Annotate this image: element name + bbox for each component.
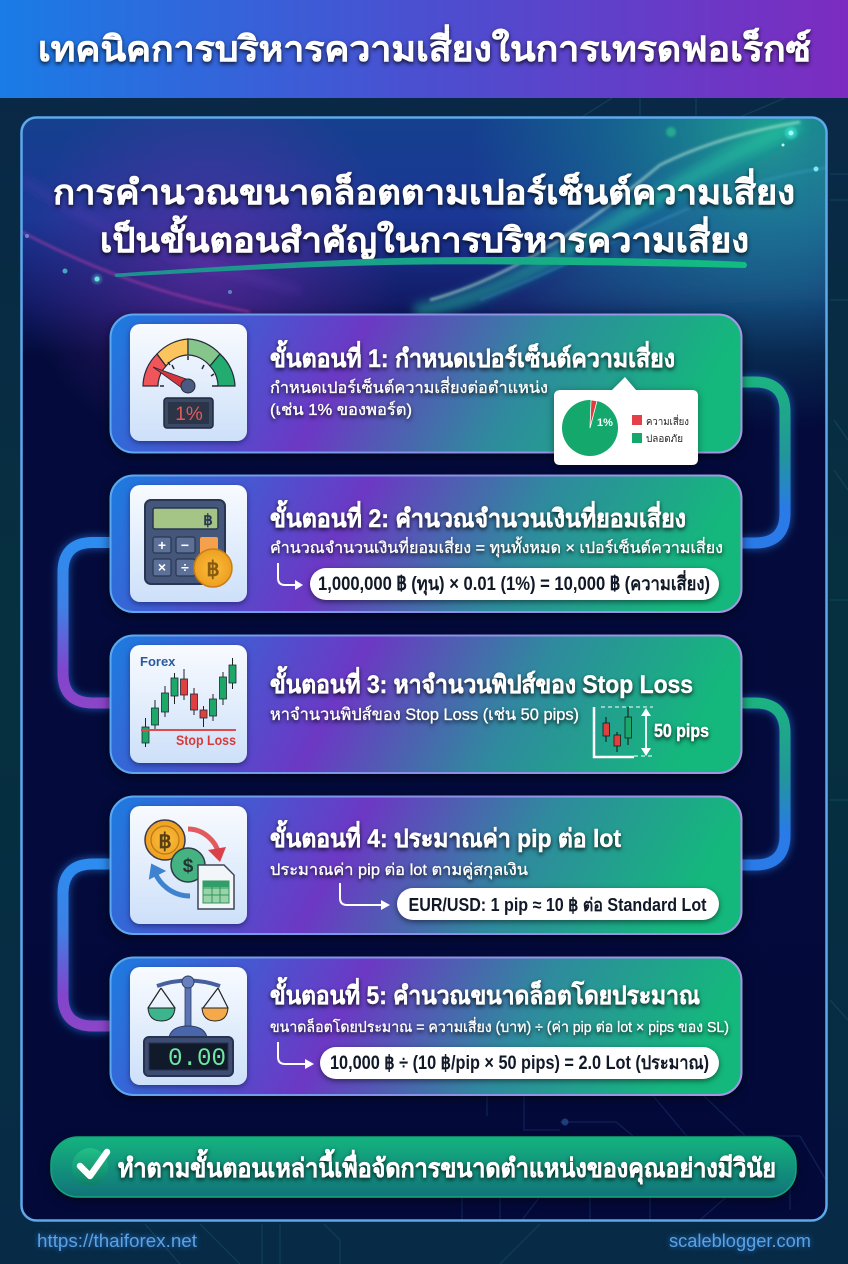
step 3 description: หาจำนวนพิปส์ของ Stop Loss (เช่น 50 pips) xyxy=(270,705,579,724)
step 5 title: ขั้นตอนที่ 5: คำนวณขนาดล็อตโดยประมาณ xyxy=(270,976,700,1010)
connector: step 4 to 5 xyxy=(63,864,110,1026)
step 2 title: ขั้นตอนที่ 2: คำนวณจำนวนเงินที่ยอมเสี่ยง xyxy=(270,499,686,533)
connectors between steps xyxy=(63,382,785,1026)
icon: currency exchange: $ xyxy=(183,856,194,877)
formula pill: 1,000,000 ฿ (ทุน) × 0.01 (1%) = 10,000 ฿ (ความเสี่ยง) xyxy=(318,570,710,596)
icon: currency exchange: ฿ xyxy=(158,830,172,853)
step 5 description: ขนาดล็อตโดยประมาณ = ความเสี่ยง (บาท) ÷ (ค่า pip ต่อ lot × pips ของ SL) xyxy=(270,1017,729,1036)
icon: calculator with baht coin: ฿ xyxy=(206,558,220,581)
step 1 title: ขั้นตอนที่ 1: กำหนดเปอร์เซ็นต์ความเสี่ยง xyxy=(270,339,675,373)
circuit background lines xyxy=(145,98,848,1264)
callout: pie chart: 1% xyxy=(597,417,613,429)
icon: calculator with baht coin: ฿ xyxy=(203,512,213,529)
icon: forex candlestick chart: Forex xyxy=(140,654,176,669)
footer link: right: scaleblogger.com xyxy=(669,1231,811,1251)
icon: calculator with baht coin: ÷ xyxy=(181,559,189,575)
step 4 card xyxy=(110,796,742,934)
icon: risk gauge: 1% xyxy=(175,404,203,425)
callout: pie chart: ความเสี่ยง xyxy=(646,414,689,428)
icon: check mark xyxy=(72,1148,108,1186)
heading: lot size calculation: การคำนวณขนาดล็อตตามเปอร์เซ็นต์ความเสี่ยง xyxy=(53,168,795,212)
closing banner xyxy=(51,1137,796,1197)
formula pill xyxy=(310,568,719,600)
arrow xyxy=(340,883,390,910)
step 5 card xyxy=(110,958,742,1095)
callout: pie chart: ปลอดภัย xyxy=(646,434,683,445)
formula pill: 10,000 ฿ ÷ (10 ฿/pip × 50 pips) = 2.0 Lot (ประมาณ) xyxy=(330,1053,709,1074)
banner message: ทำตามขั้นตอนเหล่านี้เพื่อจัดการขนาดตำแหน่งของคุณอย่างมีวินัย xyxy=(118,1148,776,1185)
connector: step 2 to 3 xyxy=(63,542,110,703)
arrow xyxy=(278,1042,314,1069)
mini chart: 50 pips stop distance: 50 pips xyxy=(654,721,709,741)
footer link: left: https://thaiforex.net xyxy=(37,1231,197,1251)
step 1 description xyxy=(270,376,548,419)
connector: step 3 to 4 xyxy=(742,703,785,865)
icon: currency exchange xyxy=(145,820,234,909)
icon: calculator with baht coin: × xyxy=(158,559,166,575)
heading: lot size calculation xyxy=(53,168,795,261)
icon: calculator with baht coin: − xyxy=(181,537,189,553)
heading: lot size calculation: เป็นขั้นตอนสำคัญในการบริหารความเสี่ยง xyxy=(100,215,749,261)
example pill: EUR/USD: 1 pip ≈ 10 ฿ ต่อ Standard Lot xyxy=(408,895,706,915)
step 4 title: ขั้นตอนที่ 4: ประมาณค่า pip ต่อ lot xyxy=(270,819,622,853)
page title: เทคนิคการบริหารความเสี่ยงในการเทรดฟอเร็กซ์ xyxy=(38,24,811,69)
mini chart: 50 pips stop distance xyxy=(594,707,709,757)
connector: step 1 to 2 xyxy=(742,382,785,543)
heading underline xyxy=(114,257,747,277)
icon: forex candlestick chart: Stop Loss xyxy=(176,733,236,748)
icon: balance scale with display xyxy=(144,976,233,1076)
step 3 title: ขั้นตอนที่ 3: หาจำนวนพิปส์ของ Stop Loss xyxy=(270,665,693,699)
example pill xyxy=(397,888,719,920)
icon: calculator with baht coin xyxy=(145,500,232,587)
step 1 description: กำหนดเปอร์เซ็นต์ความเสี่ยงต่อตำแหน่ง xyxy=(270,376,548,397)
step 1 card xyxy=(110,314,742,465)
step 3 card xyxy=(110,636,742,773)
formula pill xyxy=(320,1047,719,1079)
step 2 description: คำนวณจำนวนเงินที่ยอมเสี่ยง = ทุนทั้งหมด × เปอร์เซ็นต์ความเสี่ยง xyxy=(270,536,723,558)
step 2 card xyxy=(110,476,742,612)
icon: balance scale with display: 0.00 xyxy=(168,1044,226,1073)
arrow xyxy=(278,563,303,590)
icon: forex candlestick chart xyxy=(140,654,236,748)
header bar xyxy=(0,0,848,98)
step 1 description: (เช่น 1% ของพอร์ต) xyxy=(270,400,412,419)
icon: calculator with baht coin: + xyxy=(158,537,166,553)
callout: pie chart xyxy=(554,377,698,465)
step 4 description: ประมาณค่า pip ต่อ lot ตามคู่สกุลเงิน xyxy=(270,862,528,880)
icon: risk gauge xyxy=(143,339,235,428)
